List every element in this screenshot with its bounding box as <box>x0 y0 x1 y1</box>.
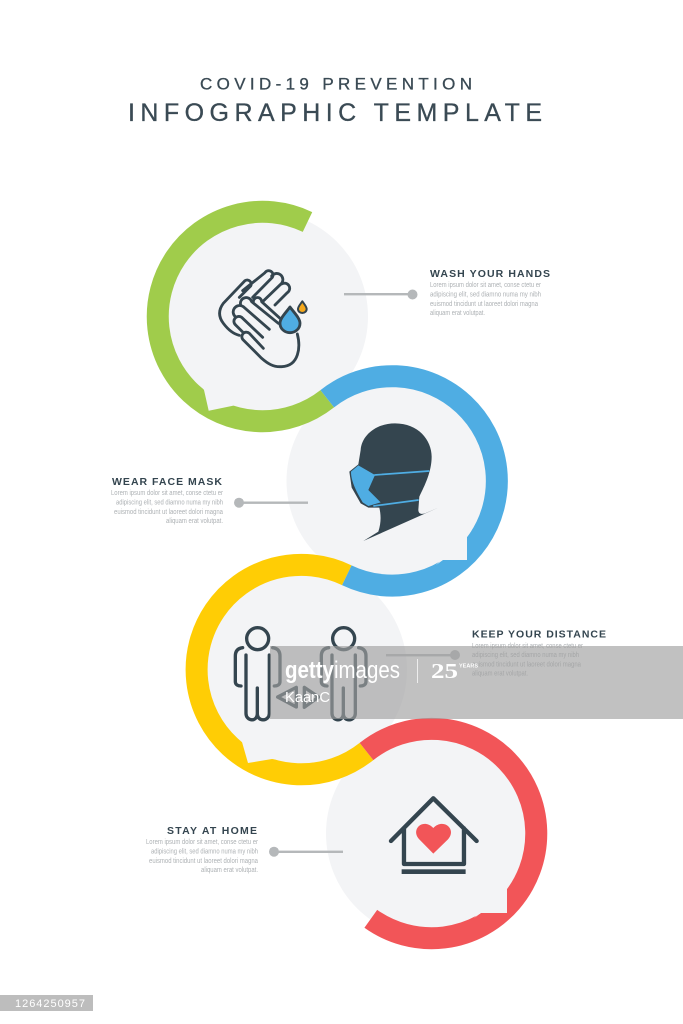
grey circle backgrounds <box>157 211 537 939</box>
title <box>128 74 542 127</box>
panel: wear face mask text <box>111 476 224 525</box>
house outline <box>391 798 477 864</box>
panel: keep your distance text: euismod tincidunt ut laoreet dolori magna <box>472 662 581 668</box>
icon: house with heart <box>391 798 477 874</box>
panel: stay at home text: aliquam erat volutpat. <box>201 867 258 874</box>
panel: wash your hands text: WASH YOUR HANDS <box>430 268 550 280</box>
connector: stay at home <box>269 847 343 857</box>
watermark banner: KaanC <box>285 690 330 706</box>
panel: wash your hands text: aliquam erat volutpat. <box>430 310 485 317</box>
connector: wear face mask <box>234 498 308 508</box>
panel: wash your hands text: adipiscing elit, sed diamno numa my nibh <box>430 292 541 298</box>
watermark banner: YEARS <box>459 664 478 670</box>
front hand <box>233 297 299 367</box>
front hand mask <box>236 300 299 367</box>
panel: wear face mask text: euismod tincidunt ut laoreet dolori magna <box>114 509 223 516</box>
panel: stay at home text: euismod tincidunt ut laoreet dolori magna <box>149 858 258 865</box>
orange drop <box>298 301 307 313</box>
watermark banner <box>270 646 683 719</box>
panel: stay at home text <box>146 825 259 874</box>
icon: head with face mask <box>349 423 438 541</box>
panel: wash your hands text: Lorem ipsum dolor sit amet, conse ctetu er <box>430 282 542 289</box>
title: COVID-19 PREVENTION <box>200 74 472 94</box>
speech tails <box>200 384 512 918</box>
left person <box>235 628 280 720</box>
panel: keep your distance text: adipiscing elit, sed diamno numa my nibh <box>472 652 579 659</box>
right person <box>321 628 366 720</box>
mask straps <box>373 471 429 506</box>
mask <box>351 465 381 506</box>
watermark banner: gettyimages <box>285 657 400 684</box>
yellow ring <box>197 565 366 774</box>
icon: two people keeping distance <box>235 628 366 720</box>
blue drop <box>280 307 300 333</box>
panel: wear face mask text: WEAR FACE MASK <box>112 476 222 488</box>
panel: stay at home text: Lorem ipsum dolor sit amet, conse ctetu er <box>146 839 259 846</box>
watermark banner: 25 <box>431 659 458 683</box>
panel: wash your hands text <box>430 268 550 317</box>
connector: wash your hands <box>344 290 418 300</box>
image id tag: 1264250957 <box>15 998 85 1010</box>
base bar <box>402 869 466 874</box>
blue ring <box>327 376 497 586</box>
panel: stay at home text: adipiscing elit, sed diamno numa my nibh <box>151 848 258 856</box>
panel: wear face mask text: aliquam erat volutpat. <box>166 518 223 525</box>
panel: keep your distance text: aliquam erat volutpat. <box>472 670 528 678</box>
red ring <box>366 729 536 938</box>
panel: keep your distance text: KEEP YOUR DISTANCE <box>472 628 606 640</box>
heart <box>416 824 451 854</box>
connector: keep your distance <box>386 650 460 660</box>
image id tag <box>0 995 93 1011</box>
green ring <box>158 212 327 421</box>
panel: keep your distance text <box>472 628 606 678</box>
panel: wash your hands text: euismod tincidunt ut laoreet dolori magna <box>430 301 538 308</box>
head silhouette <box>349 423 438 541</box>
title: INFOGRAPHIC TEMPLATE <box>128 99 542 127</box>
panel: keep your distance text: Lorem ipsum dolor sit amet, conse ctetu er <box>472 643 584 650</box>
distance arrows <box>278 687 319 707</box>
panel: wear face mask text: adipiscing elit, sed diamno numa my nibh <box>116 500 223 506</box>
back hand <box>220 271 290 335</box>
panel: stay at home text: STAY AT HOME <box>167 825 257 837</box>
icon: washing hands <box>220 271 307 367</box>
panel: wear face mask text: Lorem ipsum dolor sit amet, conse ctetu er <box>111 490 224 497</box>
